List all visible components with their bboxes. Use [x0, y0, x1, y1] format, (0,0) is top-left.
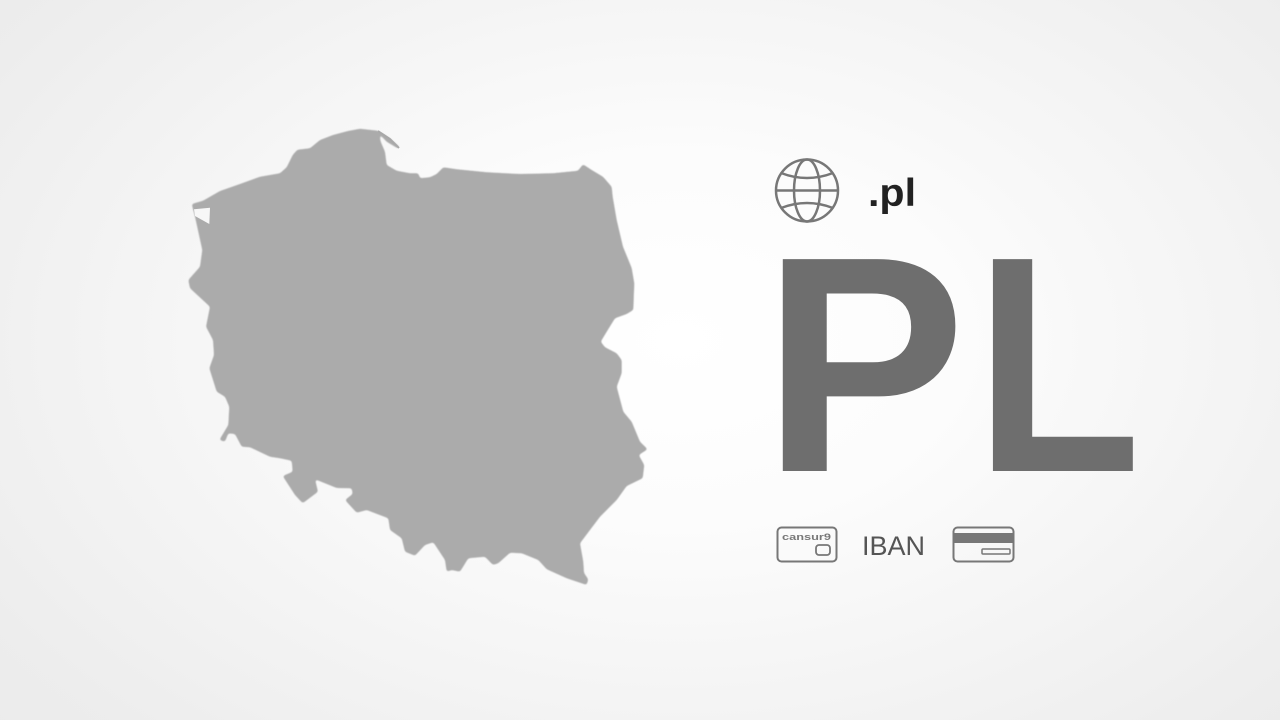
map: Hel peninsula: [378, 131, 399, 148]
map: Szczecin lagoon: [194, 208, 210, 224]
country code: L: [975, 192, 1141, 537]
icon: card with embossed text: [778, 528, 836, 562]
country code: P: [762, 193, 966, 536]
icon: globe: [776, 160, 838, 222]
map: Poland silhouette: [188, 129, 648, 585]
icon: bank card: [954, 528, 1014, 562]
icon: card with embossed text: cansur9: [782, 532, 831, 543]
IBAN label: IBAN: [862, 531, 925, 561]
country code: [762, 192, 1141, 537]
domain label: .pl: [868, 172, 916, 215]
